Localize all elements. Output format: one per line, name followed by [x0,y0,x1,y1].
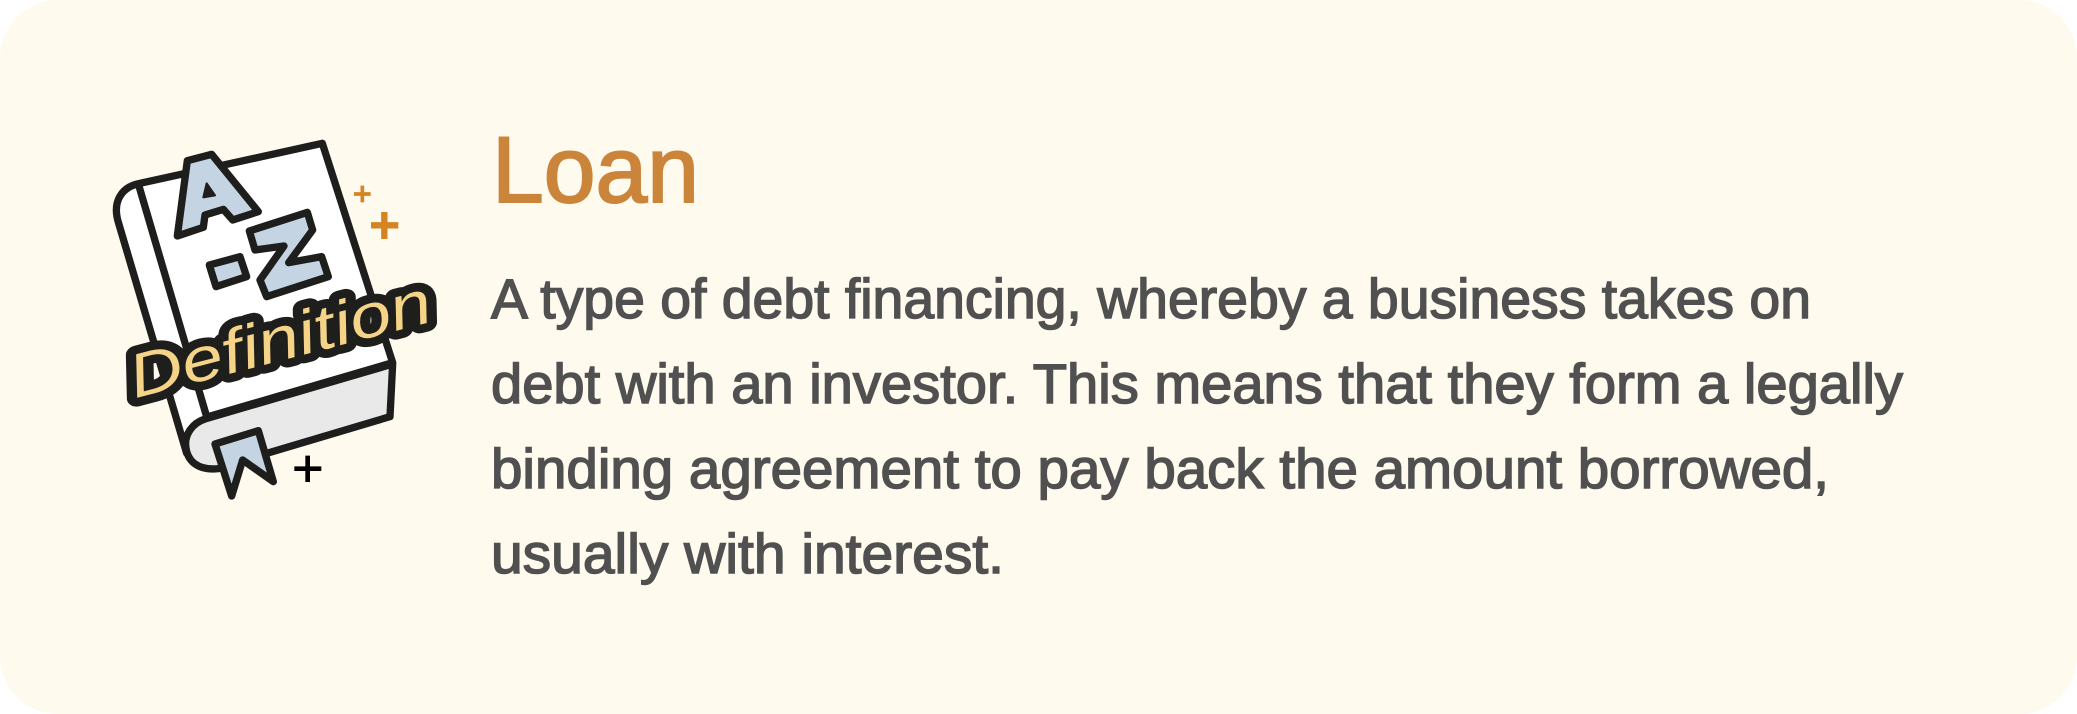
bookmark [215,431,273,496]
large orange plus [371,212,398,239]
book pages [186,364,393,469]
body line 3: binding agreement to pay back the amount borrowed, [491,437,1829,500]
word: Definition: Definition [121,267,439,412]
body line 1: A type of debt financing, whereby a business takes on [491,267,1811,330]
body line 2: debt with an investor. This means that they form a legally [491,352,1903,415]
body line 4: usually with interest. [491,522,1004,585]
book spine line [139,185,207,417]
small orange plus [354,186,371,202]
title: Loan [492,117,699,222]
book cover [116,143,393,453]
icon: definition book [116,143,439,496]
dash [209,257,247,287]
letter Z [249,212,328,297]
body text [491,267,1903,585]
letter A counter [203,183,215,197]
black plus [294,456,321,482]
letter A [177,154,258,236]
